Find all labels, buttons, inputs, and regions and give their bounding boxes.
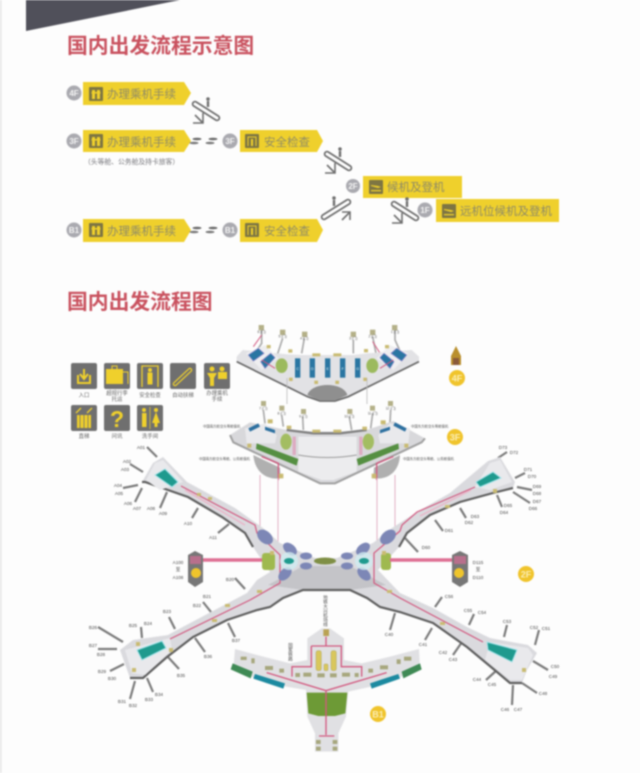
step: B1 check-in [66, 219, 191, 242]
terminal floor [120, 457, 537, 683]
step: 3F security: 安全检查 [264, 135, 310, 149]
parking [307, 693, 347, 716]
legend: oversize baggage: 托运 [112, 395, 123, 403]
A gate labels: A05 [115, 491, 124, 496]
lower edge [237, 362, 419, 401]
step: B1 security: B1 [225, 226, 236, 235]
A gate labels: A09 [159, 511, 168, 516]
legend: security: 安全检查 [139, 391, 161, 399]
label: airport express line: 地铁大兴机场线 [323, 594, 328, 627]
note: right check-in label lower: 中国东方航空头等舱、公务舱值机 [403, 456, 454, 461]
floor plan 4F: 3 (门) [349, 336, 357, 341]
step: B1 security: 安全检查 [264, 224, 310, 238]
label: national railway: 国家铁路 [288, 643, 293, 662]
C gate labels: C47 [514, 707, 523, 712]
lobes [253, 455, 281, 479]
D gate labels: D71 [524, 467, 533, 472]
note: left check-in label upper: 中国南方航空头等舱值机 [203, 424, 241, 428]
floor plan 4F: 5 (门) [279, 334, 287, 339]
step: 1F remote boarding: 远机位候机及登机 [460, 204, 552, 218]
remote gate pod D: 至 [476, 567, 481, 572]
title: flow map: 国内出发流程图 [67, 291, 213, 314]
floor badge B1: B1 [372, 710, 384, 720]
D gate labels: D66 [529, 506, 538, 511]
icon: escalator down 2F to 1F [392, 197, 416, 223]
gate stubs [263, 410, 391, 430]
C gate labels: C55 [464, 608, 473, 613]
gate stubs [256, 330, 400, 357]
floor plan 4F: E [326, 366, 329, 371]
legend: toilets [137, 405, 163, 440]
floor plan 3F: 8 (门) [278, 410, 286, 415]
gate stubs C [390, 597, 548, 705]
C gate labels: C49 [549, 674, 558, 679]
D gate labels [422, 445, 542, 550]
floor badge 4F: 4F [452, 374, 463, 384]
floor badge 2F: 2F [521, 570, 532, 580]
floor plan 3F: 9 (门) [299, 413, 307, 418]
A gate labels: A08 [147, 506, 156, 511]
B gate labels: B33 [145, 697, 154, 702]
A gate labels: A01 [137, 445, 146, 450]
step: 3F security: 3F [225, 137, 235, 146]
A gate labels [114, 445, 217, 540]
C gate labels: C45 [488, 682, 497, 687]
legend: escalator [170, 363, 196, 399]
hall floor [230, 421, 425, 483]
pier heads [125, 460, 533, 680]
B gate labels: B28 [97, 652, 106, 657]
remote gate pod A: A100 [173, 560, 184, 565]
floor plan 3F: 10 (门) [344, 413, 354, 418]
note: left check-in label lower: 中国南方航空头等舱、公务舱值机 [199, 456, 250, 461]
teal halls [137, 469, 517, 662]
step: 2F boarding: 2F [348, 182, 358, 191]
green courts [276, 358, 288, 373]
green platforms [231, 663, 422, 678]
B gate labels: B29 [98, 669, 107, 674]
remote bridge right [390, 558, 458, 562]
legend: check-in [204, 363, 230, 403]
floor badge 2F [518, 566, 534, 582]
flow schematic [66, 82, 559, 242]
step: 1F remote boarding: 1F [420, 206, 430, 215]
D gate labels: D69 [533, 484, 542, 489]
floor badge 4F [449, 346, 465, 386]
C gate labels: C43 [449, 657, 458, 662]
legend: entrance: 入口 [79, 392, 89, 399]
floor plan 2F [89, 445, 560, 712]
D gate labels: D61 [445, 528, 454, 533]
icon: footsteps B1 [190, 227, 218, 233]
D gate labels: D68 [533, 491, 542, 496]
A gate labels: A02 [123, 459, 132, 464]
A gate labels: A07 [133, 506, 142, 511]
A gate labels: A10 [184, 521, 193, 526]
remote gate pod D: D110 [473, 575, 484, 580]
step: 2F boarding: 候机及登机 [387, 180, 445, 194]
B gate labels: B34 [155, 692, 164, 697]
icon: escalator down 3F to 2F [325, 147, 349, 173]
B gate labels: B31 [118, 699, 127, 704]
B gate labels: B32 [129, 703, 138, 708]
step: 3F check-in: 3F [69, 137, 79, 146]
legend: oversize baggage: 超规行李 [106, 389, 128, 397]
outer rim [230, 435, 425, 483]
title: schematic: 国内出发流程示意图 [67, 34, 254, 58]
check-in halls [245, 423, 410, 443]
floor badge 3F [447, 429, 463, 445]
step: 3F check-in: （头等舱、公务舱及持卡旅客） [84, 157, 179, 166]
floor plan 4F: 2 (门) [369, 334, 377, 339]
hall floor [237, 350, 419, 401]
legend: oversize baggage [104, 363, 130, 403]
B gate labels: B22 [193, 603, 202, 608]
lower edges [142, 482, 253, 547]
floor plan 4F: 1 (门) [391, 329, 399, 334]
floor badge B1 [370, 706, 386, 722]
step: 4F check-in: 4F [69, 89, 79, 98]
floor plan 4F: D [311, 366, 314, 371]
legend: information: ? [110, 406, 124, 432]
remote gate pod D: D115 [473, 560, 484, 565]
B gate labels: B24 [144, 621, 153, 626]
step: 4F check-in [66, 82, 191, 105]
floor plan 4F [237, 325, 419, 401]
step: B1 check-in: B1 [69, 226, 80, 235]
floor plan 4F: 6 (门) [258, 329, 266, 334]
floor plan 3F: 12 (门) [386, 405, 396, 410]
D gate labels: D73 [499, 445, 508, 450]
C gate labels: C50 [551, 664, 560, 669]
remote gate pod A: 至 [176, 567, 181, 572]
legend: information [104, 405, 130, 440]
D gate labels: D65 [504, 503, 513, 508]
legend [71, 363, 230, 440]
step: 3F security [222, 130, 323, 152]
top dark wedge [26, 0, 180, 31]
gate stubs B [98, 578, 245, 699]
D gate labels: D60 [422, 545, 431, 550]
C gate labels: C44 [473, 677, 482, 682]
D gate labels: D63 [471, 514, 480, 519]
legend: check-in: 办理乘机 [206, 389, 228, 397]
legend: lift [71, 405, 97, 440]
C gate labels: C48 [539, 691, 548, 696]
C gate labels: C54 [478, 610, 487, 615]
C gate labels: C53 [503, 619, 512, 624]
legend: entrance [71, 363, 97, 399]
floor badge 3F: 3F [450, 432, 461, 442]
dome [307, 385, 347, 401]
floor plan 3F [230, 401, 425, 483]
legend: toilets: 洗手间 [142, 432, 158, 440]
remote gate pod A: A108 [173, 575, 184, 580]
floor plan 3F: 7 (门) [259, 405, 267, 410]
pink route [170, 486, 280, 639]
legend: information: 问讯 [112, 432, 123, 440]
D gate labels: D67 [533, 499, 542, 504]
D gate labels: D70 [528, 474, 537, 479]
B gate labels: B25 [129, 623, 138, 628]
gate stubs A [123, 447, 229, 533]
step: 1F remote boarding [418, 199, 559, 222]
remote gate pod A [173, 551, 203, 587]
step: B1 security [222, 219, 323, 242]
B gate labels: B20 [226, 577, 235, 582]
note: right check-in label upper: 中国东方航空头等舱值机 [411, 424, 449, 428]
C gate labels: C40 [385, 632, 394, 637]
legend: security [137, 363, 163, 399]
basement floor [233, 628, 420, 752]
B gate labels: B26 [89, 625, 98, 630]
B gate labels: B23 [163, 609, 172, 614]
floor plan 4F: C [296, 366, 299, 371]
remote gate pod D [452, 551, 484, 587]
B gate labels [89, 577, 241, 708]
floor plan 3F: 11 (门) [368, 410, 378, 415]
B gate labels: B27 [89, 643, 98, 648]
hub apron [268, 566, 386, 590]
rail hall [316, 651, 336, 671]
legend: check-in: 手续 [212, 395, 223, 403]
A gate labels: A03 [121, 467, 130, 472]
C gate labels: C51 [542, 626, 551, 631]
B gate labels: B37 [232, 638, 241, 643]
step: B1 check-in: 办理乘机手续 [107, 224, 176, 238]
remote bridge left [193, 558, 262, 562]
B gate labels: B35 [177, 673, 186, 678]
icon: footsteps 3F [190, 138, 218, 144]
A gate labels: A06 [124, 501, 133, 506]
C gate labels: C42 [439, 650, 448, 655]
step: 2F boarding [346, 176, 462, 198]
floor plan 4F: G [356, 366, 359, 371]
icon: escalator down 4F to 3F [193, 97, 217, 123]
concourse lounges [254, 527, 399, 583]
C gate labels: C56 [445, 594, 454, 599]
C gate labels: C46 [501, 707, 510, 712]
C gate labels [385, 594, 560, 712]
A gate labels: A04 [114, 483, 123, 488]
step: 3F check-in: 办理乘机手续 [107, 135, 176, 149]
pink route [267, 637, 387, 736]
green strips [256, 443, 298, 466]
D gate labels: D72 [510, 450, 519, 455]
floor plan 4F: F [341, 366, 344, 371]
legend: escalator: 自动扶梯 [172, 391, 194, 399]
gate halls [246, 345, 408, 370]
facility marks [132, 489, 526, 672]
step: 4F check-in: 办理乘机手续 [107, 87, 176, 101]
page edge [0, 0, 2, 773]
centre hall [298, 437, 357, 480]
B gate labels: B21 [203, 594, 212, 599]
D gate labels: D62 [465, 520, 474, 525]
floor plan 4F: 4 (门) [300, 336, 308, 341]
central hub [262, 552, 391, 570]
D gate labels: D64 [500, 510, 509, 515]
B gate labels: B36 [204, 654, 213, 659]
floor plan B1 [231, 594, 422, 752]
connectors 3F to 2F [260, 475, 395, 545]
facility marks [241, 657, 411, 751]
C gate labels: C41 [419, 642, 428, 647]
gate stubs D [405, 452, 532, 552]
B gate labels: B30 [108, 676, 117, 681]
connectors 4F to 3F [287, 378, 367, 404]
step: 3F check-in [66, 130, 191, 166]
legend: lift: 直梯 [79, 432, 90, 440]
C gate labels: C52 [530, 625, 539, 630]
A gate labels: A11 [209, 535, 217, 540]
icon: escalator up B1 to 2F [324, 196, 350, 220]
